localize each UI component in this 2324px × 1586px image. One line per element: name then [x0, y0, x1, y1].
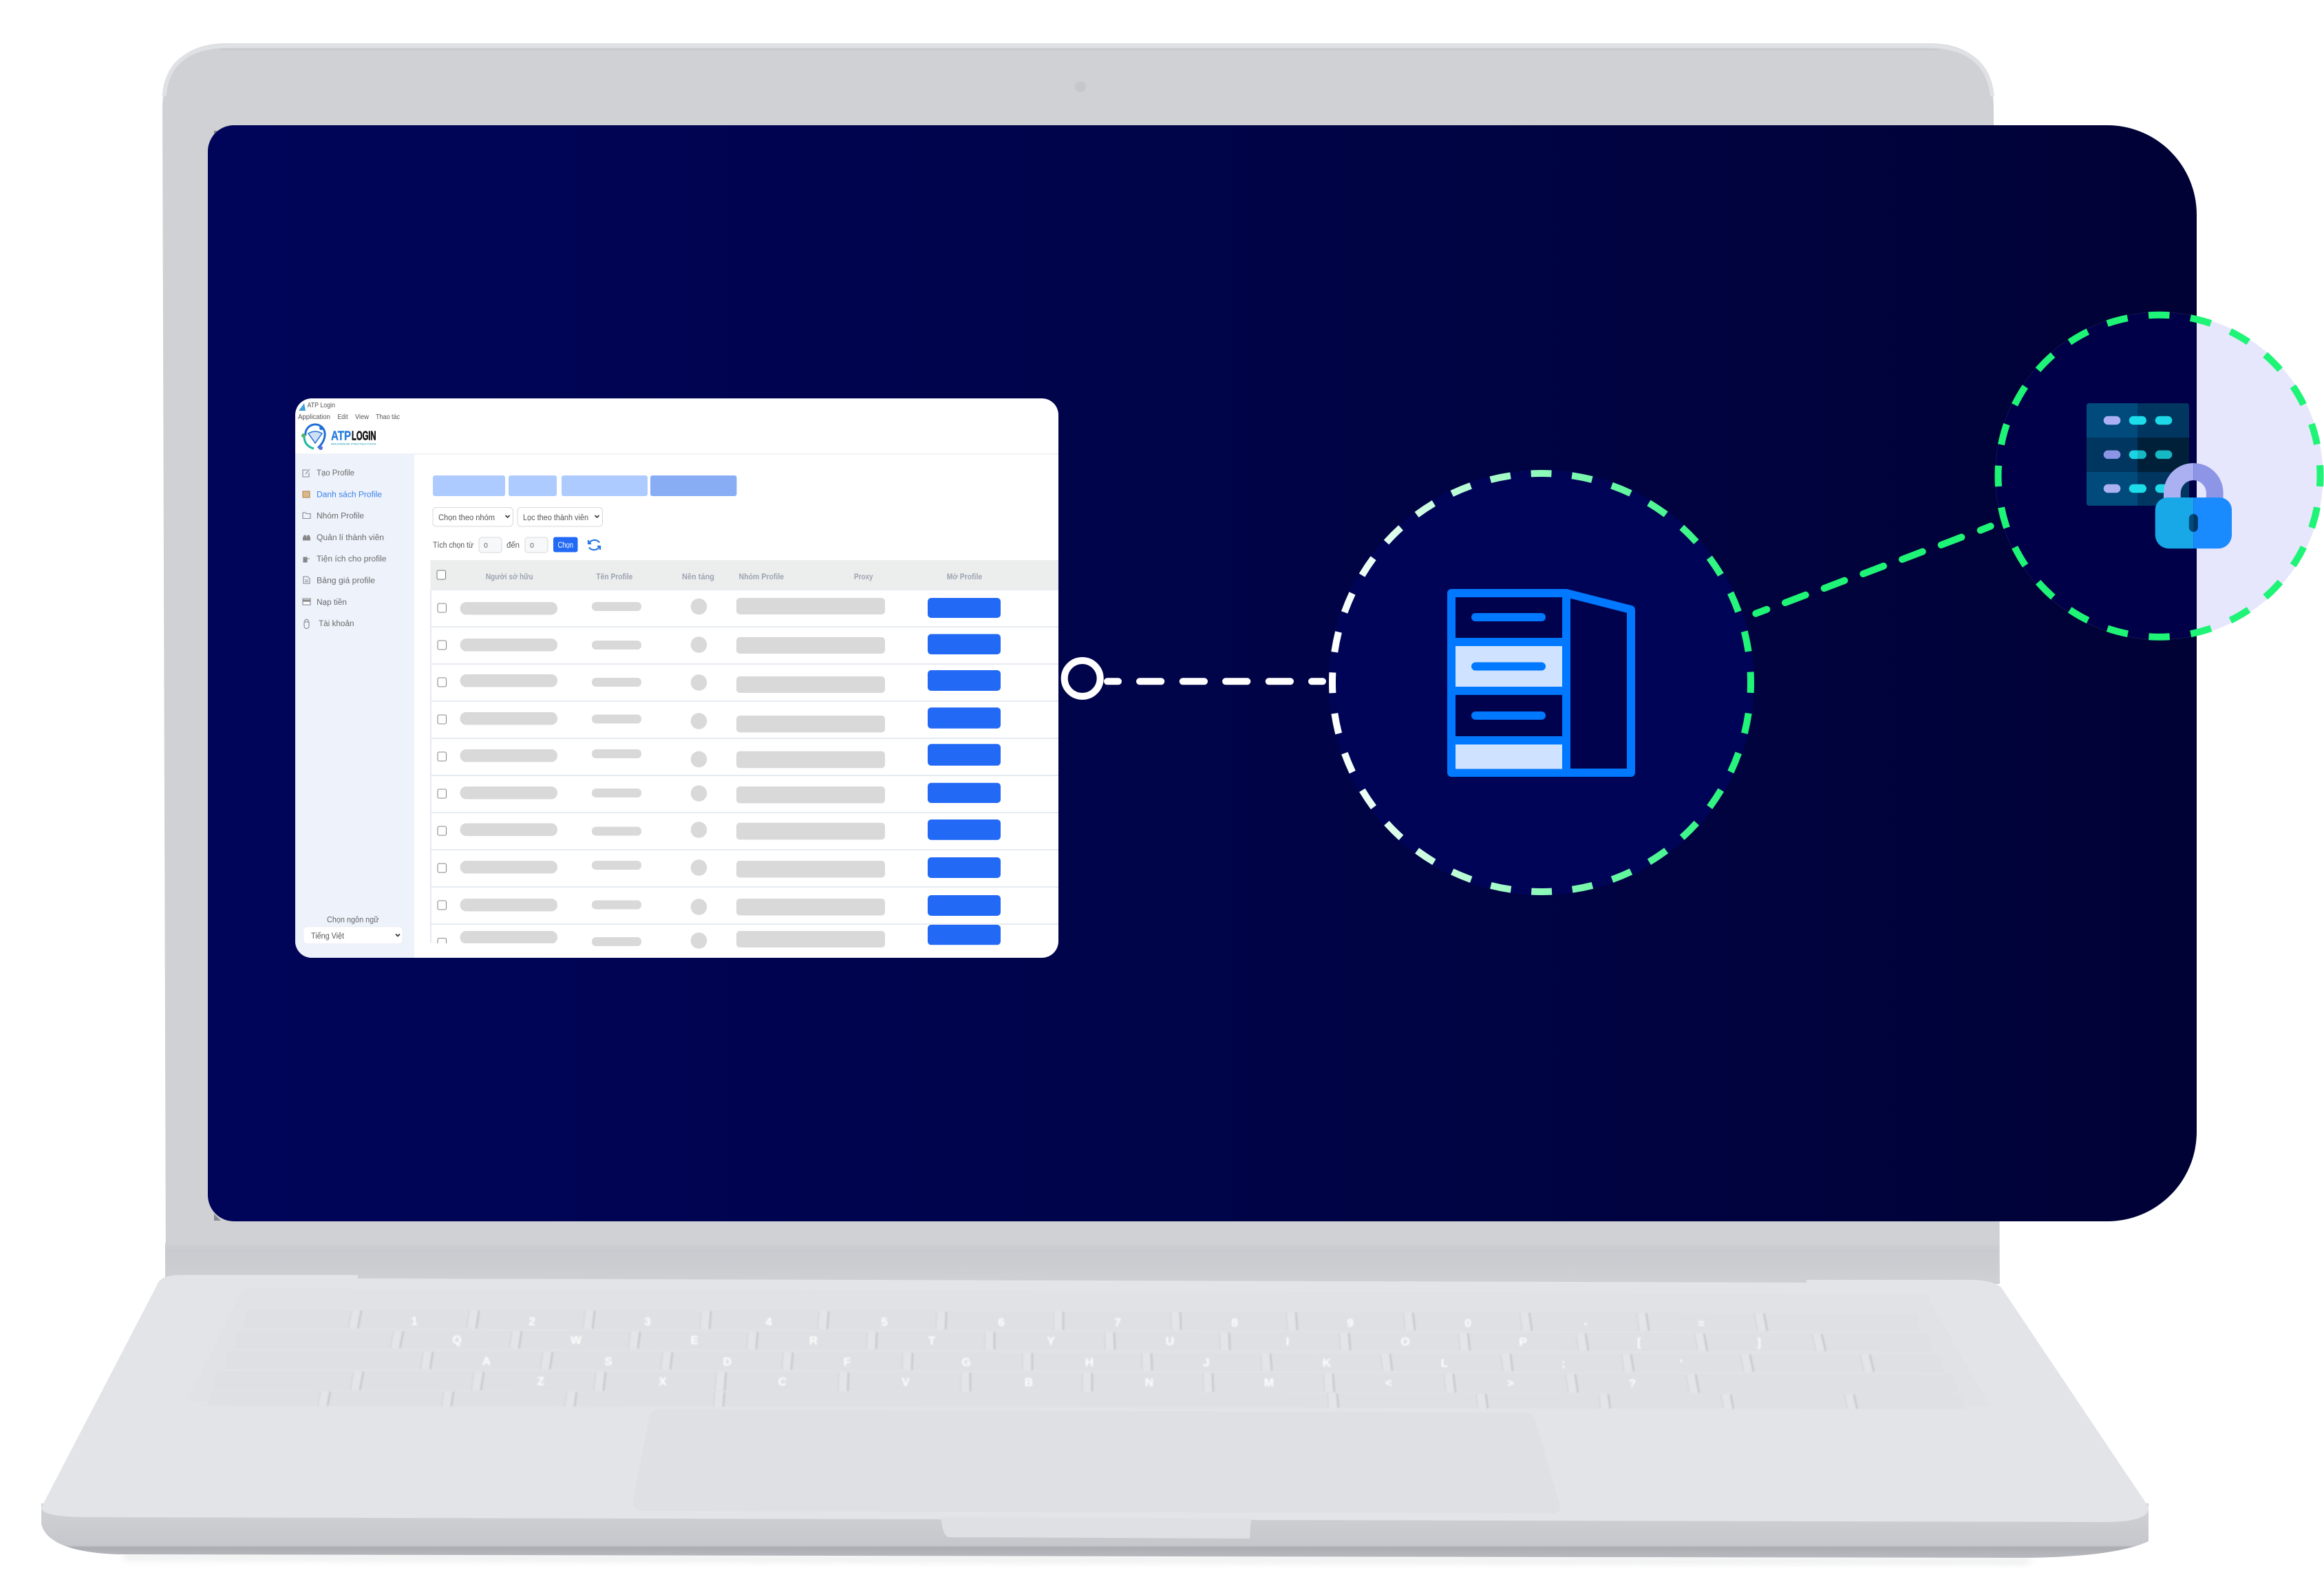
range select row: đến [507, 542, 520, 550]
key labels: I [1286, 1335, 1289, 1348]
row checkboxes [438, 603, 446, 910]
laptop lid [162, 43, 2000, 1284]
secure server circle [1996, 312, 2323, 640]
table row dividers [430, 589, 1058, 943]
key labels: N [1145, 1376, 1153, 1389]
key labels: 9 [1347, 1316, 1354, 1329]
key labels: X [659, 1375, 667, 1388]
key labels: = [1698, 1317, 1705, 1330]
key labels: W [571, 1333, 582, 1347]
sidebar menu: Nạp tiền [317, 599, 347, 607]
key labels: E [690, 1333, 699, 1347]
window title bar [298, 401, 400, 421]
platform icon placeholders [691, 599, 707, 949]
top surface [41, 1275, 2149, 1522]
sidebar menu: Tiện ích cho profile [317, 555, 387, 564]
key labels: 6 [998, 1316, 1005, 1329]
key labels: D [723, 1355, 732, 1369]
sidebar menu [317, 469, 387, 628]
key labels: G [961, 1355, 971, 1369]
table header: Proxy [854, 573, 873, 581]
key labels: > [1507, 1377, 1514, 1390]
key labels: R [809, 1334, 818, 1347]
key labels: H [1085, 1356, 1094, 1369]
sidebar menu: Tạo Profile [317, 469, 354, 478]
table header: Mở Profile [947, 573, 982, 581]
sidebar [295, 454, 414, 958]
owner placeholders [460, 602, 557, 911]
range select row [433, 537, 600, 553]
table header: Người sở hữu [486, 573, 533, 581]
key labels: J [1203, 1356, 1210, 1369]
key labels: O [1400, 1335, 1410, 1348]
range select row: Tích chọn từ [433, 542, 473, 550]
table header: Nền tảng [682, 573, 714, 581]
key labels [411, 1315, 1761, 1390]
white dashed line [1107, 678, 1323, 685]
key labels: Z [537, 1375, 544, 1388]
table header [431, 560, 1058, 590]
key labels: [ [1637, 1336, 1641, 1349]
filter dropdowns: Chọn theo nhóm [438, 514, 495, 522]
logo: MAXIMUM PROTECTION [331, 442, 376, 446]
logo: LOGIN [352, 429, 376, 443]
sidebar menu: Tài khoản [319, 620, 354, 628]
key labels: B [1025, 1375, 1033, 1389]
last partial row [437, 931, 557, 943]
key labels: ? [1629, 1377, 1636, 1390]
green dashed connector [1756, 526, 1991, 614]
language selector: Tiếng Việt [311, 932, 345, 941]
base shadow [124, 1555, 2030, 1563]
key labels: F [844, 1355, 851, 1369]
key labels: K [1323, 1356, 1332, 1369]
key labels: U [1166, 1335, 1174, 1348]
connector node [1065, 661, 1100, 696]
app window: ATP Login [295, 398, 1058, 958]
logo [301, 425, 376, 450]
key labels: P [1519, 1336, 1527, 1349]
name placeholders [592, 602, 641, 946]
table header: Tên Profile [596, 573, 632, 581]
key labels: 7 [1114, 1316, 1121, 1329]
icon: server rack [2087, 403, 2189, 506]
language selector [303, 917, 403, 944]
window title bar: Edit [337, 413, 348, 421]
header divider [295, 453, 1058, 455]
window title bar: Thao tác [376, 413, 400, 421]
webcam [1075, 81, 1086, 92]
key labels: M [1264, 1376, 1274, 1389]
key labels: < [1385, 1376, 1392, 1389]
window title bar: View [355, 413, 369, 421]
keyboard keys [208, 1310, 1965, 1409]
key labels: Q [452, 1333, 462, 1347]
sidebar menu: Bảng giá profile [317, 577, 375, 585]
trackpad [633, 1409, 1560, 1513]
key labels: 2 [529, 1315, 535, 1328]
refresh icon [588, 540, 600, 550]
key labels: 5 [881, 1316, 888, 1329]
key labels: T [928, 1334, 936, 1347]
window title bar: ATP Login [307, 401, 335, 409]
table header: Nhóm Profile [739, 573, 784, 581]
icon: profile cabinet [1451, 593, 1631, 773]
key labels: 0 [1464, 1317, 1471, 1330]
key labels: 8 [1231, 1316, 1238, 1329]
sidebar menu: Nhóm Profile [317, 512, 364, 520]
window title bar: Application [298, 413, 330, 421]
key labels: Y [1047, 1334, 1055, 1347]
sidebar icons [303, 469, 310, 629]
connector: app window to database [1065, 661, 1323, 696]
icon: padlock [2155, 463, 2232, 548]
database circle [1329, 470, 1754, 895]
key labels: L [1441, 1357, 1448, 1370]
laptop base [41, 1275, 2149, 1563]
filter dropdowns: Lọc theo thành viên [523, 514, 588, 522]
range select row: 0 [530, 542, 534, 550]
key labels: A [482, 1355, 491, 1368]
filter dropdowns [433, 508, 603, 526]
toolbar tabs [433, 475, 736, 496]
key labels: ; [1561, 1357, 1566, 1370]
key labels: ] [1757, 1336, 1761, 1349]
sidebar menu: Danh sách Profile [317, 491, 382, 500]
laptop screen panel [208, 125, 2197, 1221]
key labels: 4 [765, 1316, 772, 1329]
front edge [41, 1503, 2149, 1558]
key labels: 3 [644, 1315, 651, 1328]
key labels: C [778, 1375, 787, 1389]
thumb notch [941, 1517, 1251, 1539]
range select row: 0 [484, 542, 488, 550]
group placeholders [736, 598, 885, 947]
key labels: 1 [411, 1315, 418, 1328]
key labels: ' [1680, 1357, 1683, 1370]
range select row: Chọn [557, 542, 573, 550]
sidebar menu: Quản lí thành viên [317, 534, 384, 542]
logo: ATP [331, 429, 351, 443]
key labels: S [604, 1355, 612, 1368]
language selector: Chọn ngôn ngữ [327, 917, 379, 925]
open profile buttons [928, 598, 1001, 945]
key labels: - [1584, 1317, 1588, 1330]
key labels: V [902, 1375, 910, 1389]
keyboard well [186, 1289, 1991, 1407]
